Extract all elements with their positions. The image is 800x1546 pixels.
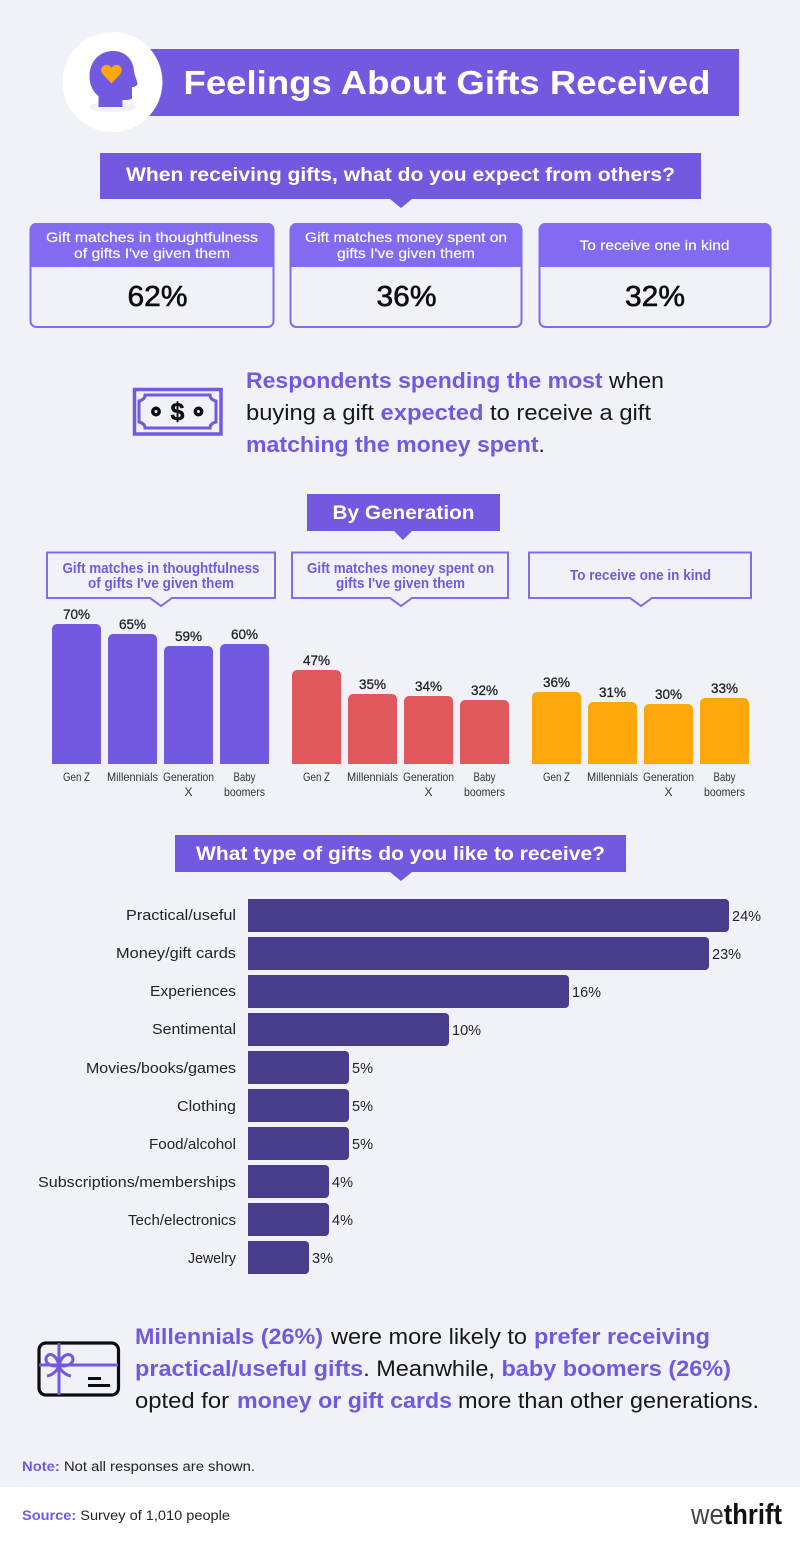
bars: thoughtfulness — [52, 624, 269, 764]
callout: money spent — [292, 552, 508, 606]
chart: gift types: Experiences — [150, 984, 236, 1000]
chart: gift types: Practical/useful — [126, 908, 236, 924]
chart: gift types: Food/alcohol — [149, 1137, 236, 1153]
chart: money spent by generation: Baby — [474, 770, 496, 784]
card: one in kind 32% — [539, 223, 771, 327]
heading: what do you expect — [100, 153, 701, 208]
chart: one in kind by generation: X — [664, 785, 673, 799]
card: thoughtfulness 62%: 62% — [128, 281, 188, 313]
bars: gift types — [248, 899, 729, 1274]
callout: thoughtfulness — [47, 552, 275, 606]
chart: gift types: 4% — [332, 1213, 353, 1229]
card: money spent 36%: 36% — [376, 281, 436, 313]
icon: dollar bill: $ — [171, 398, 185, 426]
chart: gift types: Jewelry — [188, 1251, 237, 1267]
callout: money spent: Gift matches money spent on — [307, 560, 494, 577]
chart: one in kind by generation: 33% — [711, 681, 738, 696]
chart: one in kind by generation — [529, 552, 751, 799]
text: millennials and baby boomers: practical/useful gifts . Meanwhile, baby boomers (26%) — [135, 1356, 731, 1381]
chart: money spent by generation — [292, 552, 509, 799]
text: millennials and baby boomers: money or gift cards — [237, 1388, 452, 1413]
chart: gift types: Clothing — [177, 1099, 236, 1115]
chart: gift types: 10% — [452, 1023, 481, 1039]
chart: one in kind by generation: 31% — [599, 685, 626, 700]
card: thoughtfulness 62%: Gift matches in thoughtfulness — [46, 229, 258, 245]
chart: gift types: 16% — [572, 985, 601, 1001]
text: millennials and baby boomers — [135, 1324, 759, 1413]
chart: gift types: Subscriptions/memberships — [38, 1175, 236, 1191]
chart: money spent by generation: Generation — [403, 770, 454, 784]
title banner — [140, 49, 739, 116]
chart: one in kind by generation: 30% — [655, 687, 682, 702]
chart: one in kind by generation: 36% — [543, 675, 570, 690]
bars: one in kind — [532, 692, 749, 764]
chart: one in kind by generation: Baby — [714, 770, 736, 784]
chart: thoughtfulness by generation: X — [184, 785, 193, 799]
logo: wethrift: wethrift — [690, 1499, 782, 1531]
chart: money spent by generation: boomers — [464, 785, 505, 799]
text: respondents spending the most: buying a gift expected to receive a gift — [246, 400, 651, 425]
chart: thoughtfulness by generation: Gen Z — [63, 770, 90, 784]
heading: by generation: By Generation — [332, 503, 474, 524]
chart: gift types: Movies/books/games — [86, 1061, 236, 1077]
chart: thoughtfulness by generation: 60% — [231, 627, 258, 642]
chart: money spent by generation: Millennials — [347, 770, 398, 784]
chart: thoughtfulness by generation: Generation — [163, 770, 214, 784]
chart: gift types: 24% — [732, 909, 761, 925]
icon: gift card — [39, 1343, 118, 1395]
chart: gift types: 5% — [352, 1061, 373, 1077]
card: one in kind 32%: To receive one in kind — [580, 237, 730, 253]
chart: thoughtfulness by generation — [47, 552, 275, 799]
chart: gift types: 5% — [352, 1137, 373, 1153]
text: millennials and baby boomers: were more likely to — [330, 1324, 527, 1349]
chart: one in kind by generation: Millennials — [587, 770, 638, 784]
chart: gift types: 23% — [712, 947, 741, 963]
text: millennials and baby boomers: prefer receiving — [534, 1324, 710, 1349]
heading: type of gifts: What type of gifts do you like to receive? — [196, 843, 605, 865]
heading: by generation — [307, 494, 500, 540]
chart: thoughtfulness by generation: 65% — [119, 617, 146, 632]
chart: gift types: 3% — [312, 1251, 333, 1267]
chart: gift types: 4% — [332, 1175, 353, 1191]
callout: money spent: gifts I've given them — [336, 575, 465, 592]
callout: thoughtfulness: of gifts I've given them — [88, 575, 234, 592]
text: respondents spending the most — [246, 368, 664, 457]
chart: thoughtfulness by generation: Millennials — [107, 770, 158, 784]
chart: money spent by generation: 32% — [471, 683, 498, 698]
chart: money spent by generation: X — [424, 785, 433, 799]
chart: money spent by generation: Gen Z — [303, 770, 330, 784]
bars: money spent — [292, 670, 509, 764]
title banner: Feelings About Gifts Received — [184, 64, 710, 101]
chart: thoughtfulness by generation: Baby — [234, 770, 256, 784]
heading: what do you expect: When receiving gifts, what do you expect from others? — [126, 164, 675, 186]
text: millennials and baby boomers: more than other generations. — [458, 1388, 759, 1413]
chart: thoughtfulness by generation: boomers — [224, 785, 265, 799]
chart: money spent by generation: 34% — [415, 679, 442, 694]
source: Source: Survey of 1,010 people — [22, 1507, 230, 1523]
card: money spent 36%: gifts I've given them — [337, 245, 475, 261]
card: money spent 36% — [290, 223, 522, 327]
chart: one in kind by generation: Generation — [643, 770, 694, 784]
callout: thoughtfulness: Gift matches in thoughtfulness — [62, 560, 260, 577]
chart: gift types: Money/gift cards — [116, 946, 236, 962]
icon: head with heart — [62, 32, 162, 132]
chart: gift types: Tech/electronics — [128, 1213, 236, 1229]
callout: one in kind — [529, 552, 751, 606]
chart: gift types — [38, 899, 761, 1274]
card: thoughtfulness 62%: of gifts I've given them — [74, 245, 230, 261]
footer — [0, 1487, 800, 1546]
chart: money spent by generation: 35% — [359, 677, 386, 692]
chart: money spent by generation: 47% — [303, 653, 330, 668]
card: thoughtfulness 62% — [30, 223, 274, 327]
chart: gift types: 5% — [352, 1099, 373, 1115]
chart: one in kind by generation: Gen Z — [543, 770, 570, 784]
heading: type of gifts — [175, 835, 626, 881]
card: one in kind 32%: 32% — [625, 281, 685, 313]
text: millennials and baby boomers: Millennials (26%) — [135, 1324, 323, 1349]
callout: one in kind: To receive one in kind — [570, 567, 711, 584]
note: Note: Not all responses are shown. — [22, 1459, 255, 1474]
chart: one in kind by generation: boomers — [704, 785, 745, 799]
text: respondents spending the most: Respondents spending the most when — [246, 368, 664, 393]
text: respondents spending the most: matching the money spent . — [246, 432, 545, 457]
chart: gift types: Sentimental — [152, 1022, 236, 1038]
card: money spent 36%: Gift matches money spent on — [305, 229, 507, 245]
text: millennials and baby boomers: opted for — [135, 1388, 229, 1413]
icon: dollar bill — [134, 390, 221, 434]
chart: thoughtfulness by generation: 70% — [63, 607, 90, 622]
chart: thoughtfulness by generation: 59% — [175, 629, 202, 644]
